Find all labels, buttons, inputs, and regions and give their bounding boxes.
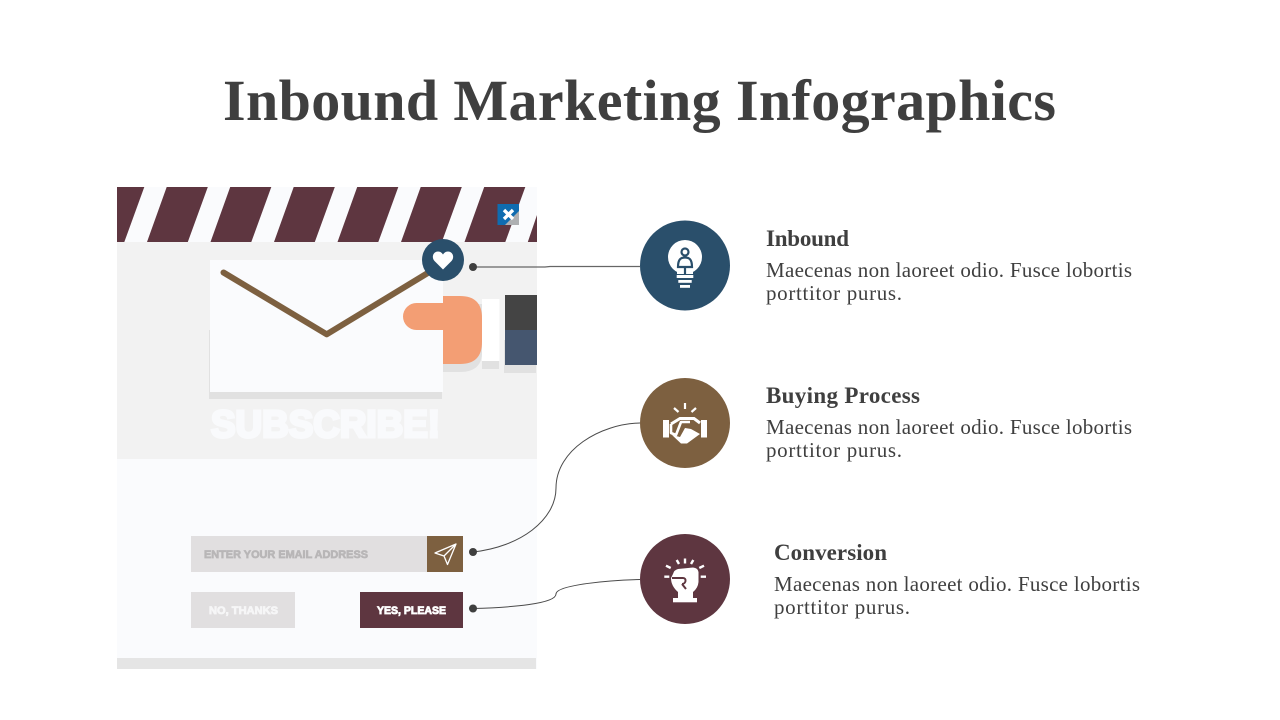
icon: light bulb with person [640, 220, 730, 310]
hand and sleeve illustration [443, 295, 537, 373]
connector: conversion [469, 580, 640, 612]
text block: buying process: porttitor purus. [766, 438, 902, 462]
bottom strip [117, 658, 536, 669]
title: Inbound Marketing Infographics [223, 68, 1056, 133]
text block: inbound [766, 226, 1132, 305]
email input [191, 536, 427, 572]
text block: conversion: Maecenas non laoreet odio. Fusce lobortis [774, 572, 1140, 596]
text block: buying process [766, 383, 1132, 462]
no thanks button: NO, THANKS [209, 605, 278, 617]
text block: inbound: Maecenas non laoreet odio. Fusce lobortis [766, 258, 1132, 282]
icon: close button [498, 204, 519, 225]
pointing finger [403, 303, 443, 330]
text block: buying process: Buying Process [766, 383, 920, 408]
envelope [209, 260, 443, 399]
email input: ENTER YOUR EMAIL ADDRESS [204, 549, 368, 561]
icon: raised fist [640, 534, 730, 624]
subscribe text: SUBSCRIBE! [211, 404, 440, 446]
send button [427, 536, 463, 572]
yes please button: YES, PLEASE [377, 605, 446, 617]
text block: buying process: Maecenas non laoreet odio. Fusce lobortis [766, 415, 1132, 439]
panel: subscribe form mockup [117, 187, 537, 669]
text block: conversion [774, 540, 1140, 619]
text block: conversion: Conversion [774, 540, 887, 565]
connector: inbound [469, 263, 640, 271]
icon: heart badge [422, 239, 464, 281]
text block: inbound: porttitor purus. [766, 281, 902, 305]
hero area [117, 242, 537, 459]
text block: conversion: porttitor purus. [774, 595, 910, 619]
connector: buying process [469, 423, 640, 556]
panel background [117, 187, 537, 669]
text block: inbound: Inbound [766, 226, 849, 251]
striped header band [117, 187, 537, 242]
yes please button [360, 592, 463, 628]
icon: handshake [640, 378, 730, 468]
no thanks button [191, 592, 295, 628]
